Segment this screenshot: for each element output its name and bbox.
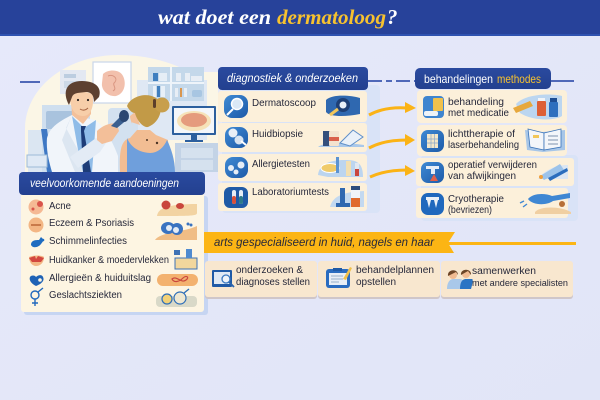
card: operatief: van afwijkingen: [448, 171, 516, 182]
row: Geslachtsziekten: [31, 288, 197, 307]
panel backing: [421, 155, 578, 221]
card: cryotherapie: (bevriezen): [448, 205, 492, 216]
shelves: [148, 67, 204, 101]
panel: diagnostiek & onderzoeken: [218, 67, 380, 213]
card: behandelplannen: opstellen: [356, 277, 396, 288]
title banner: wat doet een: [158, 5, 271, 29]
panel heading: diagnostiek & onderzoeken: [227, 71, 358, 85]
connector lines: [20, 80, 574, 83]
title banner: dermatoloog: [277, 5, 386, 29]
card: samenwerken: met andere specialisten: [472, 278, 568, 289]
card: cryotherapie: Cryotherapie: [448, 194, 504, 205]
arrow: allergietesten to operatief: [370, 165, 415, 177]
panel backing: [222, 85, 380, 213]
card: lichttherapie: laserbehandeling: [448, 140, 519, 151]
row: Acne: Acne: [49, 201, 71, 212]
panel heading: behandelingen: [424, 72, 493, 86]
illustration: doctor examining patient: [25, 55, 218, 172]
card: cryotherapie: [416, 188, 571, 218]
card: medicatie: met medicatie: [448, 108, 509, 119]
panel: veelvoorkomende aandoeningen: [19, 172, 208, 315]
card: Huidbiopsie: [218, 123, 367, 152]
row: Allergieën & huiduitslag: Allergieën & huiduitslag: [49, 273, 151, 284]
panel heading: [218, 67, 368, 90]
row: Allergieën & huiduitslag: [30, 273, 198, 286]
title banner: ?: [387, 5, 398, 29]
card: onderzoeken en diagnoses: [205, 261, 317, 299]
card: lichttherapie: lichttherapie of: [448, 129, 515, 140]
monitor and desk: [172, 106, 218, 172]
card: Allergietesten: Allergietesten: [252, 159, 310, 170]
panel: behandelingen methodes: [415, 68, 578, 221]
card: samenwerken: [441, 261, 573, 299]
panel heading: [19, 172, 205, 195]
arrow: huidbiopsie to lichttherapie: [369, 134, 415, 148]
doctor: [41, 81, 129, 172]
card: Laboratoriumtests: [218, 183, 367, 211]
card: lichttherapie: [417, 125, 567, 156]
patient: [120, 95, 175, 172]
card: operatief: operatief verwijderen: [448, 160, 537, 171]
card: behandelplannen: behandelplannen: [356, 265, 434, 276]
clinic backdrop: [25, 55, 218, 172]
panel heading: methodes: [497, 72, 541, 86]
row: Acne: [28, 200, 197, 216]
row: Eczeem & Psoriasis: [28, 218, 197, 240]
title banner: [0, 0, 600, 36]
panel heading: [415, 68, 551, 89]
panel body: [21, 190, 208, 315]
card: Huidbiopsie: Huidbiopsie: [252, 129, 303, 140]
row: Schimmelinfecties: Schimmelinfecties: [49, 236, 127, 247]
card: samenwerken: samenwerken: [472, 266, 536, 277]
banner: arts gespecialiseerd: [204, 232, 576, 253]
card: operatief: [416, 158, 574, 186]
row: Huidkanker & moedervlekken: Huidkanker & moedervlekken: [49, 255, 169, 266]
card: onderzoeken en diagnoses: onderzoeken &: [236, 265, 303, 276]
card: Laboratoriumtests: Laboratoriumtests: [252, 187, 329, 198]
card: Allergietesten: [218, 154, 367, 181]
row: Eczeem & Psoriasis: Eczeem & Psoriasis: [49, 218, 134, 229]
card: medicatie: [417, 90, 567, 123]
card: medicatie: behandeling: [448, 97, 504, 108]
card: behandelplannen: [318, 261, 440, 299]
card: Dermatoscoop: Dermatoscoop: [252, 98, 316, 109]
banner: arts gespecialiseerd: arts gespecialiseerd in huid, nagels en haar: [214, 235, 435, 249]
arrow: dermatoscoop to medicatie: [369, 102, 416, 115]
panel heading: veelvoorkomende aandoeningen: [30, 176, 179, 190]
row: Huidkanker & moedervlekken: [29, 249, 197, 269]
wall poster: [93, 62, 131, 103]
card: onderzoeken en diagnoses: diagnoses stellen: [236, 277, 310, 288]
card: Dermatoscoop: [218, 91, 367, 122]
row: Geslachtsziekten: Geslachtsziekten: [49, 290, 122, 301]
